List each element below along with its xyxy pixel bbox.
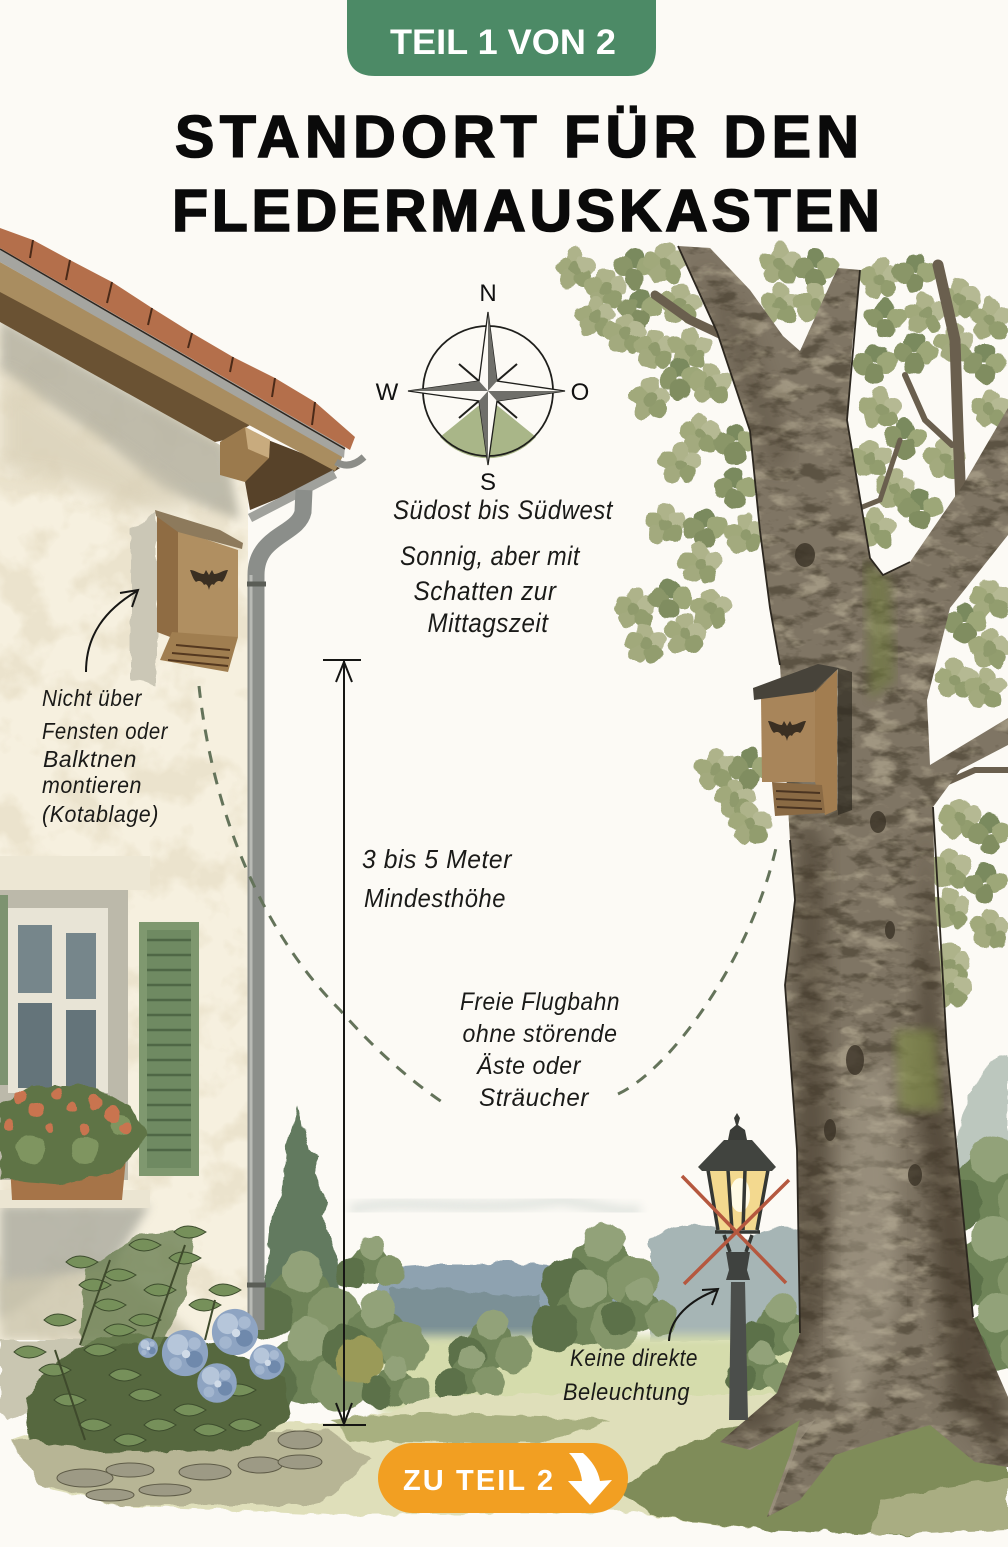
height arrow	[323, 660, 366, 1425]
button: ZU TEIL 2	[403, 1465, 553, 1497]
compass: N	[479, 280, 497, 307]
label: height	[362, 844, 513, 913]
label: height: Mindesthöhe	[364, 883, 506, 913]
compass: S	[480, 469, 496, 496]
label: orientation: Mittagszeit	[428, 608, 549, 638]
label: no lighting: Beleuchtung	[563, 1379, 690, 1406]
roof	[0, 228, 355, 510]
stone path	[57, 1431, 322, 1501]
label: flight path: Sträucher	[479, 1084, 590, 1112]
lower wall fade	[0, 1340, 120, 1420]
bushes and hydrangeas	[14, 1226, 290, 1452]
window	[0, 856, 199, 1208]
label: no lighting	[563, 1345, 698, 1406]
bat box on wall	[155, 510, 243, 672]
red cross	[682, 1176, 789, 1284]
arrow: to lamp	[669, 1289, 718, 1341]
dashed flight path	[199, 686, 776, 1102]
tree foliage	[554, 243, 1008, 1008]
gutter and downpipe	[247, 457, 364, 1330]
note: not above windows: montieren	[42, 772, 142, 798]
label: flight path: Äste oder	[475, 1052, 582, 1080]
top tab	[347, 0, 656, 76]
background landscape	[10, 1055, 1008, 1535]
label: orientation	[393, 495, 614, 638]
note: not above windows: Balktnen	[43, 746, 137, 772]
bat box on tree	[753, 664, 852, 816]
note: not above windows	[42, 685, 169, 827]
label: height: 3 bis 5 Meter	[362, 844, 513, 874]
house wall	[0, 320, 248, 1340]
conifer tree	[262, 1105, 342, 1300]
house	[0, 228, 364, 1501]
button	[378, 1443, 628, 1513]
label: orientation: Schatten zur	[414, 576, 557, 606]
title	[172, 104, 880, 244]
tree	[554, 240, 1008, 1530]
compass: W	[376, 379, 399, 406]
tree trunk	[670, 240, 1008, 1530]
title: FLEDERMAUSKASTEN	[172, 178, 880, 244]
lamp post	[682, 1113, 789, 1420]
compass	[376, 280, 589, 496]
tree branches	[655, 265, 1008, 790]
note: not above windows: Nicht über	[42, 685, 143, 711]
arrow: to wall box	[86, 590, 138, 672]
label: flight path: Freie Flugbahn	[460, 988, 620, 1016]
ground	[10, 1395, 1008, 1530]
icon: arrow	[568, 1453, 612, 1505]
label: no lighting: Keine direkte	[570, 1345, 698, 1372]
top tab: TEIL 1 VON 2	[390, 23, 616, 62]
label: orientation: Sonnig, aber mit	[400, 541, 581, 571]
label: flight path: ohne störende	[462, 1020, 618, 1048]
label: orientation: Südost bis Südwest	[393, 495, 614, 525]
title: STANDORT FÜR DEN	[175, 104, 859, 170]
label: flight path	[460, 988, 620, 1112]
note: not above windows: (Kotablage)	[42, 801, 159, 827]
flower box	[0, 1085, 148, 1200]
note: not above windows: Fensten oder	[42, 718, 169, 744]
compass: O	[571, 379, 589, 406]
